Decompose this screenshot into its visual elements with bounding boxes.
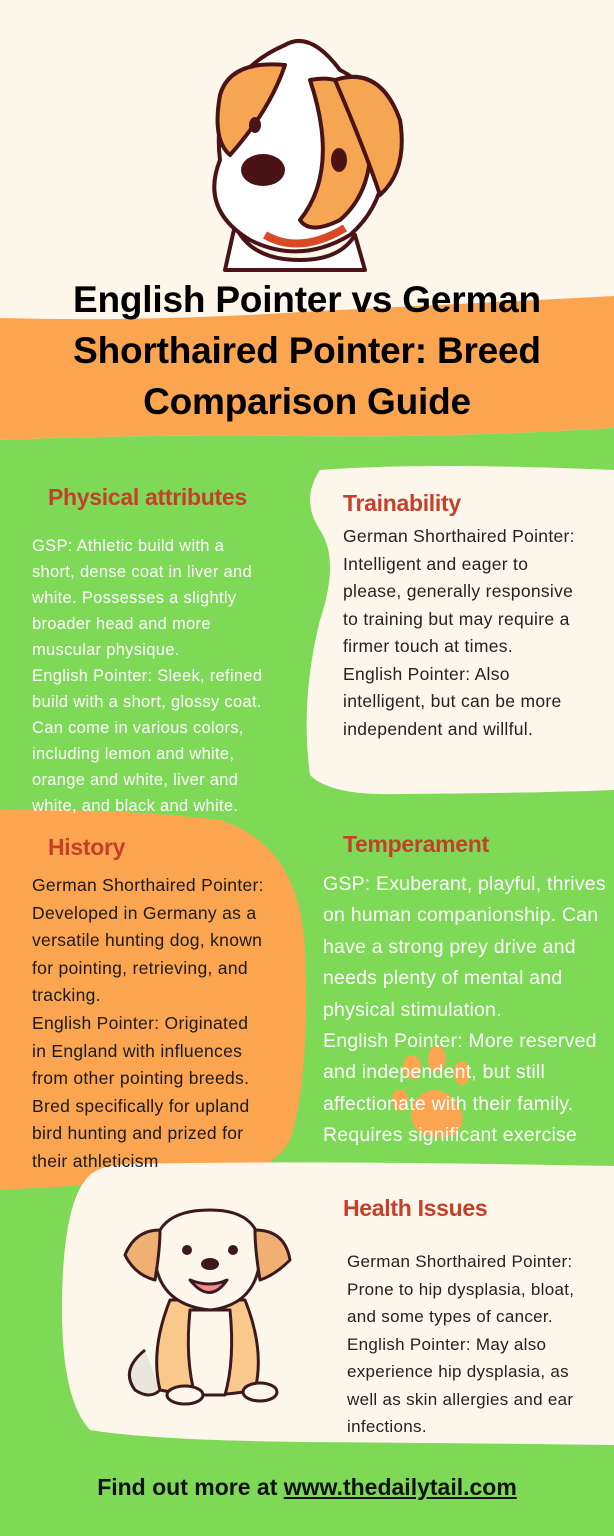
text: history: in England with influences	[32, 1041, 242, 1061]
text: temperament: on human companionship. Can	[323, 904, 598, 926]
panel: temperament	[323, 831, 606, 1146]
text: physical: short, dense coat in liver and	[32, 563, 252, 581]
title	[73, 279, 541, 422]
text: physical: orange and white, liver and	[32, 771, 238, 789]
text: health: well as skin allergies and ear	[347, 1390, 573, 1408]
text: health: infections.	[347, 1417, 427, 1436]
text: physical: Can come in various colors,	[32, 719, 244, 737]
footer: Find out more at www.thedailytail.com	[97, 1474, 517, 1500]
text: history: Bred specifically for upland	[32, 1096, 250, 1116]
text: temperament: affectionate with their family.	[323, 1093, 573, 1115]
text: trainability	[343, 526, 575, 738]
text: health: English Pointer: May also	[347, 1334, 546, 1354]
text: temperament: GSP: Exuberant, playful, thrives	[323, 873, 606, 895]
heading: temperament: Temperament	[343, 831, 489, 857]
heading: trainability: Trainability	[343, 490, 461, 516]
panel: physical attributes	[32, 484, 262, 815]
text: trainability: Intelligent and eager to	[343, 554, 528, 574]
text: history: tracking.	[32, 985, 101, 1005]
title: English Pointer vs German	[73, 279, 541, 320]
text: physical: build with a short, glossy coat.	[32, 693, 262, 711]
text: health: Prone to hip dysplasia, bloat,	[347, 1280, 574, 1298]
heading: physical: Physical attributes	[48, 484, 247, 510]
heading: health: Health Issues	[343, 1195, 487, 1221]
text: trainability: German Shorthaired Pointer:	[343, 526, 575, 546]
text: temperament	[323, 873, 606, 1146]
text: temperament: and independent, but still	[323, 1061, 545, 1083]
title: Comparison Guide	[143, 381, 471, 422]
text: history: their athleticism	[32, 1151, 159, 1171]
text: history	[32, 875, 264, 1171]
panel: history	[32, 834, 264, 1171]
text: history: bird hunting and prized for	[32, 1123, 243, 1143]
text: temperament: physical stimulation.	[323, 999, 502, 1021]
text: health: experience hip dysplasia, as	[347, 1362, 569, 1381]
text: health: German Shorthaired Pointer:	[347, 1252, 572, 1271]
text: history: for pointing, retrieving, and	[32, 958, 248, 978]
text: trainability: firmer touch at times.	[343, 636, 513, 656]
text: physical: including lemon and white,	[32, 745, 234, 763]
text: trainability: independent and willful.	[343, 718, 533, 738]
text: history: versatile hunting dog, known	[32, 930, 262, 950]
text: trainability: please, generally responsive	[343, 581, 573, 601]
text: physical: English Pointer: Sleek, refined	[32, 667, 262, 685]
text: physical: broader head and more	[32, 615, 211, 633]
text: history: English Pointer: Originated	[32, 1013, 248, 1033]
text: physical: white. Possesses a slightly	[32, 589, 236, 607]
text: history: from other pointing breeds.	[32, 1068, 249, 1088]
panel: trainability	[343, 490, 575, 738]
text: trainability: English Pointer: Also	[343, 664, 510, 684]
text: health: and some types of cancer.	[347, 1307, 553, 1326]
text: physical	[32, 537, 262, 815]
text: temperament: needs plenty of mental and	[323, 967, 562, 989]
text: history: Developed in Germany as a	[32, 903, 256, 923]
icon: paw print	[392, 1046, 470, 1138]
text: temperament: Requires significant exercise	[323, 1124, 577, 1146]
text: physical: muscular physique.	[32, 641, 180, 659]
text: health	[347, 1252, 574, 1436]
text: history: German Shorthaired Pointer:	[32, 875, 264, 895]
text: trainability: to training but may require a	[343, 608, 570, 628]
panel: health issues	[343, 1195, 574, 1436]
heading: history: History	[48, 834, 125, 860]
text: temperament: English Pointer: More reserved	[323, 1030, 597, 1052]
icon: sitting puppy	[124, 1208, 292, 1406]
text: trainability: intelligent, but can be more	[343, 691, 562, 711]
title: Shorthaired Pointer: Breed	[73, 330, 541, 371]
text: physical: GSP: Athletic build with a	[32, 537, 224, 555]
icon: dog head	[212, 38, 404, 272]
text: physical: white, and black and white.	[32, 797, 238, 815]
text: temperament: have a strong prey drive and	[323, 936, 576, 958]
